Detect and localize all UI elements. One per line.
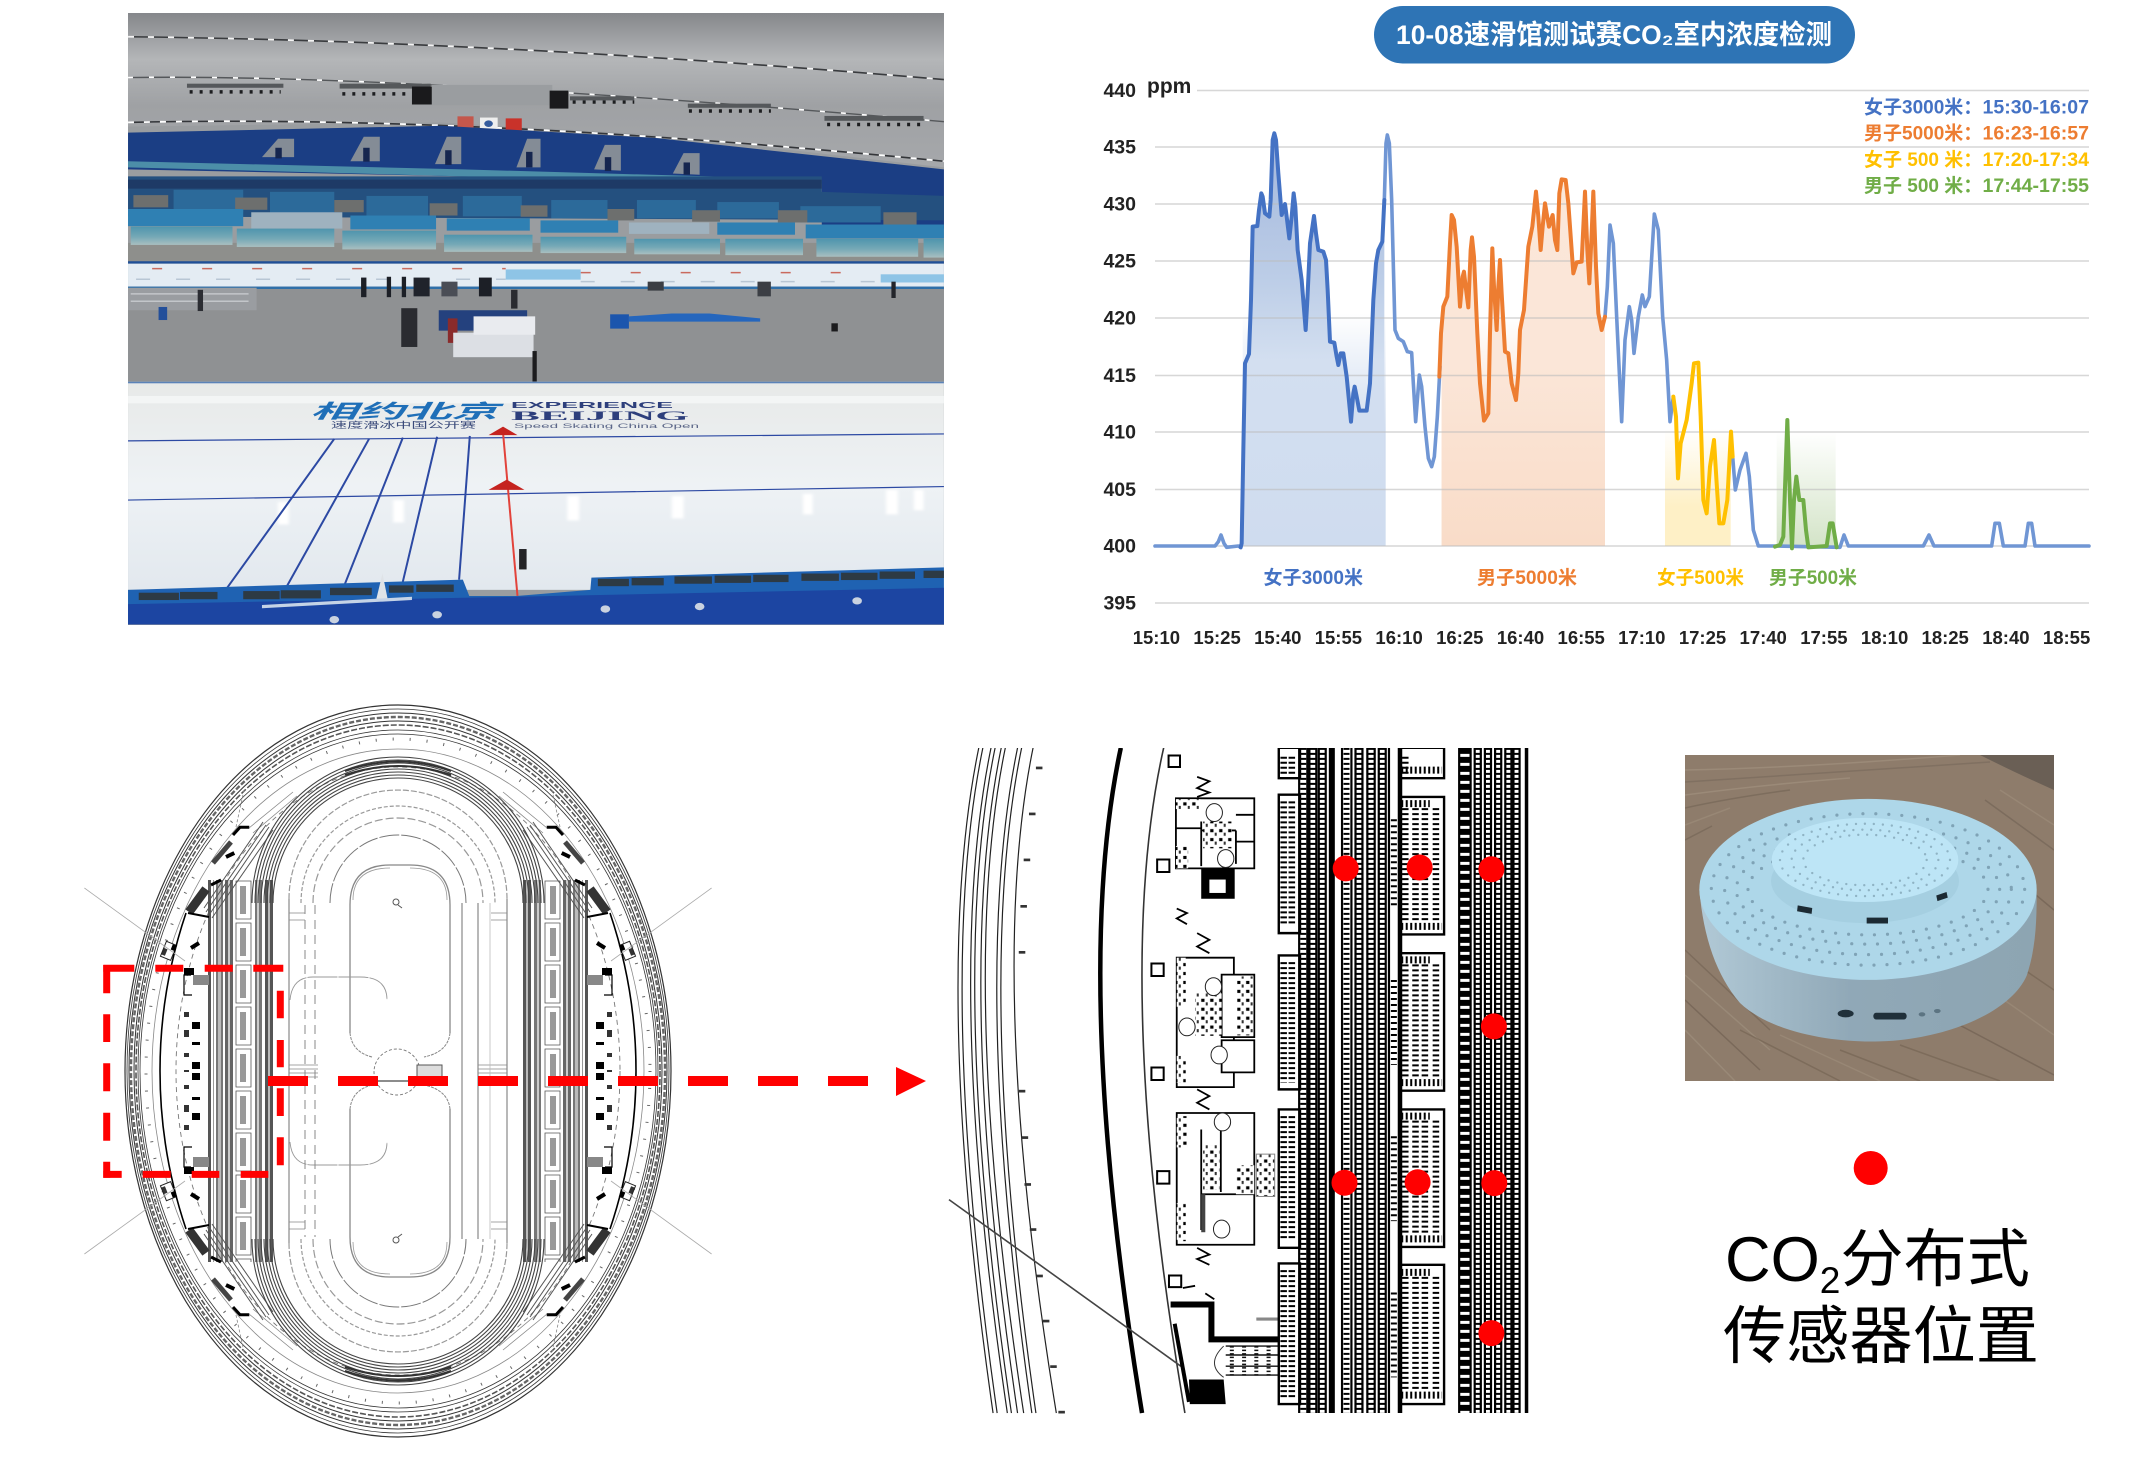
stair core [1171,1305,1279,1404]
diagonal leader line [949,1200,1181,1366]
legend text: CO2 sensor position: CO [1725,1225,1820,1295]
legend of event times: 女子3000米： [1864,96,1982,118]
event labels under the curve [1264,566,1857,589]
lighting trusses [187,84,924,125]
washroom block 3 [1177,1113,1275,1245]
legend of event times: 女子 500 米： [1864,148,1982,171]
x axis labels: 18:25 [1922,627,1969,648]
overall CO2 line [1155,135,2089,547]
men's 5000 m line [1439,179,1605,421]
y axis labels: 440 [1103,80,1136,102]
small squares [1151,755,1181,1287]
ports [1838,1009,1941,1019]
ice logo text: Speed Skating China Open [514,423,699,429]
track and rink lines [84,757,712,1385]
legend of event times: 男子5000米： [1864,122,1982,144]
panel: stadium photo [128,13,944,625]
long ladder seating columns [1299,748,1520,1413]
women's 500 m line [1673,363,1733,523]
signage band [128,209,944,238]
x axis labels [1133,627,2090,648]
legend of event times: 17:44-17:55 [1982,176,2089,197]
event labels under the curve: 男子500米 [1769,567,1857,589]
ceiling light strips [128,37,944,161]
column tick marks [1019,767,1065,1413]
x axis labels: 18:55 [2043,627,2090,648]
sensor body [1699,889,2037,1042]
thick aisle walls [1332,748,1527,1413]
x axis labels: 17:10 [1618,627,1665,648]
x axis labels: 18:40 [1982,627,2030,648]
y axis labels: 405 [1103,479,1136,501]
y axis labels: 410 [1103,422,1136,444]
outer roof rings [125,705,671,1437]
y axis labels: 415 [1103,365,1136,387]
panel: sensor photo [1685,755,2054,1081]
legend text: CO2 sensor position [1723,1225,2039,1372]
y axis labels: 435 [1103,136,1136,158]
ice logo text: EXPERIENCE [511,400,673,410]
y axis labels: 400 [1103,536,1136,558]
x axis labels: 17:25 [1679,627,1726,648]
door zigzags [1177,777,1214,1299]
x axis labels: 15:55 [1315,627,1362,648]
event labels under the curve: 男子5000米 [1477,567,1577,589]
red dashed selection box [103,965,283,1178]
ceiling [128,13,944,167]
legend text: CO2 sensor position: 分布式 [1840,1225,2030,1295]
washroom block 2 [1177,958,1254,1087]
inner floor [128,289,944,382]
men's 500 m line [1775,420,1837,548]
barrier [128,567,944,625]
y axis labels: 420 [1103,308,1136,330]
y axis labels: 425 [1103,250,1136,272]
women's 3000 m line [1241,133,1384,547]
x axis labels: 16:40 [1497,627,1544,648]
wood grain [1685,755,2054,1081]
washroom block 1 [1176,798,1254,899]
center cap [1771,870,1959,923]
y axis labels: 395 [1103,592,1136,614]
legend of event times: 15:30-16:07 [1982,98,2089,118]
ice logo text: 相约北京 [310,401,504,422]
shaded event areas [1243,133,1836,546]
x axis labels: 15:40 [1254,627,1301,648]
grid lines [1155,90,2089,603]
roof curves [958,748,1056,1413]
panel: stadium floor plan [84,705,712,1437]
legend of event times: 16:23-16:57 [1982,124,2089,144]
upper stand [128,126,944,229]
event labels under the curve: 女子3000米 [1264,566,1363,589]
ice reflections [278,490,924,525]
arrow: dashed arrow to detail plan [268,1067,926,1096]
y axis unit: ppm [1147,75,1191,98]
x axis labels: 16:10 [1375,627,1423,648]
seating blocks [208,880,588,1262]
thick wall arc [1100,748,1142,1413]
ice logo text: BEIJING [511,409,689,423]
seating column outlines [1279,748,1444,1404]
legend text: CO2 sensor position: 2 [1820,1260,1840,1301]
legend of event times: 男子 500 米： [1864,175,1982,197]
flags [457,116,522,131]
CO2 line series [1155,133,2089,548]
chart title pill: 10-08速滑馆测试赛CO₂室内浓度检测 [1396,19,1832,50]
ice lines [128,434,944,588]
legend of event times: 17:20-17:34 [1982,150,2089,171]
advertising boards [128,261,944,264]
panel: enlarged plan with sensor positions [949,748,1527,1413]
x axis labels: 15:10 [1133,627,1180,648]
legend: red sensor dot [1854,1151,1888,1185]
perforated dots [1711,814,2025,965]
mid tier seats [128,176,944,220]
x axis labels: 17:55 [1800,627,1848,648]
x axis labels: 17:40 [1740,627,1787,648]
y axis labels: 430 [1103,194,1136,216]
ice [128,382,944,590]
ice logo text: 速度滑冰中国公开赛 [331,420,476,430]
legend text: CO2 sensor position: 传感器位置 [1723,1302,2039,1372]
ice logo text [310,400,699,430]
cap slots [1797,892,1948,924]
legend of event times [1864,96,2089,197]
lower seats [128,243,944,263]
y axis labels [1103,80,1136,614]
x axis labels: 16:25 [1436,627,1483,648]
panel: CO2 concentration chart [1103,6,2090,648]
floor objects [128,277,896,382]
dark corner shadow [1980,755,2054,790]
block seating rows [1284,757,1442,1397]
sensor position dots [1332,854,1507,1346]
x axis labels: 15:25 [1193,627,1241,648]
x axis labels: 16:55 [1558,627,1605,648]
event labels under the curve: 女子500米 [1657,566,1744,589]
chart title pill [1374,6,1855,64]
x axis labels: 18:10 [1861,627,1908,648]
